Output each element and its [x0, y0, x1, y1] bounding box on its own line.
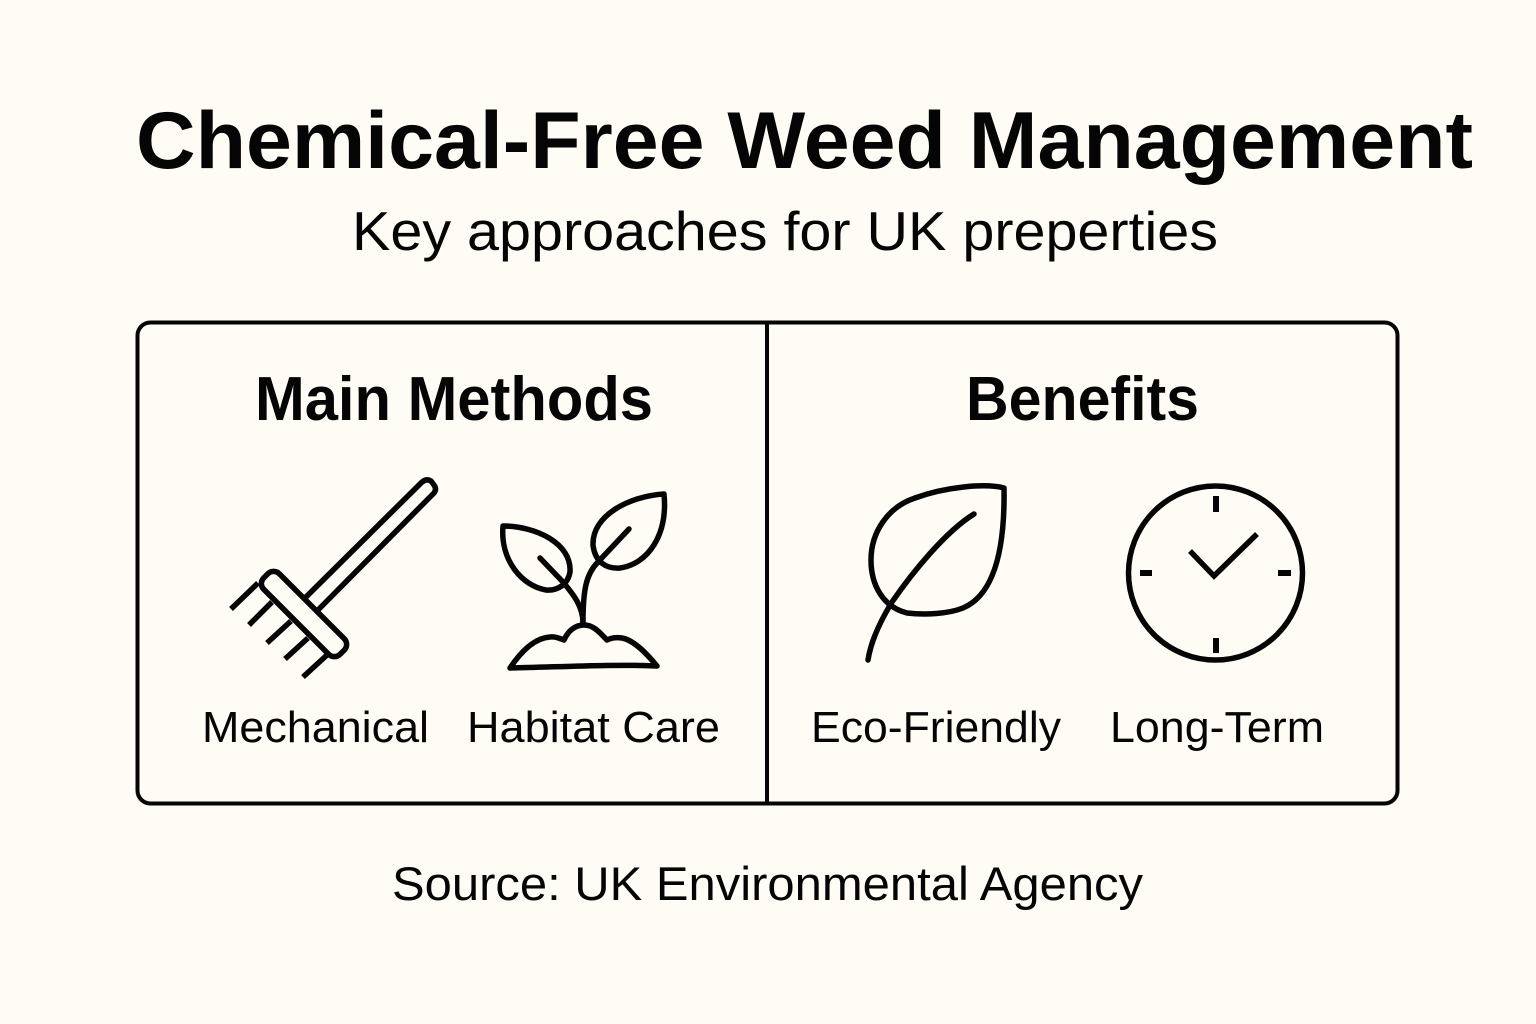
label: long-term: Long-Term — [1110, 703, 1324, 752]
icon: clock — [1128, 486, 1302, 660]
panel: main methods and benefits — [138, 322, 1398, 804]
icon: sprout — [503, 494, 665, 668]
label: mechanical: Mechanical — [202, 703, 429, 752]
icon: leaf — [868, 486, 1004, 660]
source: Source: UK Environmental Agency — [392, 857, 1144, 910]
icon: rake — [231, 480, 436, 677]
label: eco-friendly: Eco-Friendly — [811, 703, 1061, 752]
heading: main methods: Main Methods — [255, 365, 653, 434]
label: habitat care: Habitat Care — [467, 703, 720, 752]
subtitle: Key approaches for UK preperties — [352, 200, 1218, 262]
title: Chemical-Free Weed Management — [136, 96, 1473, 186]
heading: benefits: Benefits — [966, 365, 1199, 434]
